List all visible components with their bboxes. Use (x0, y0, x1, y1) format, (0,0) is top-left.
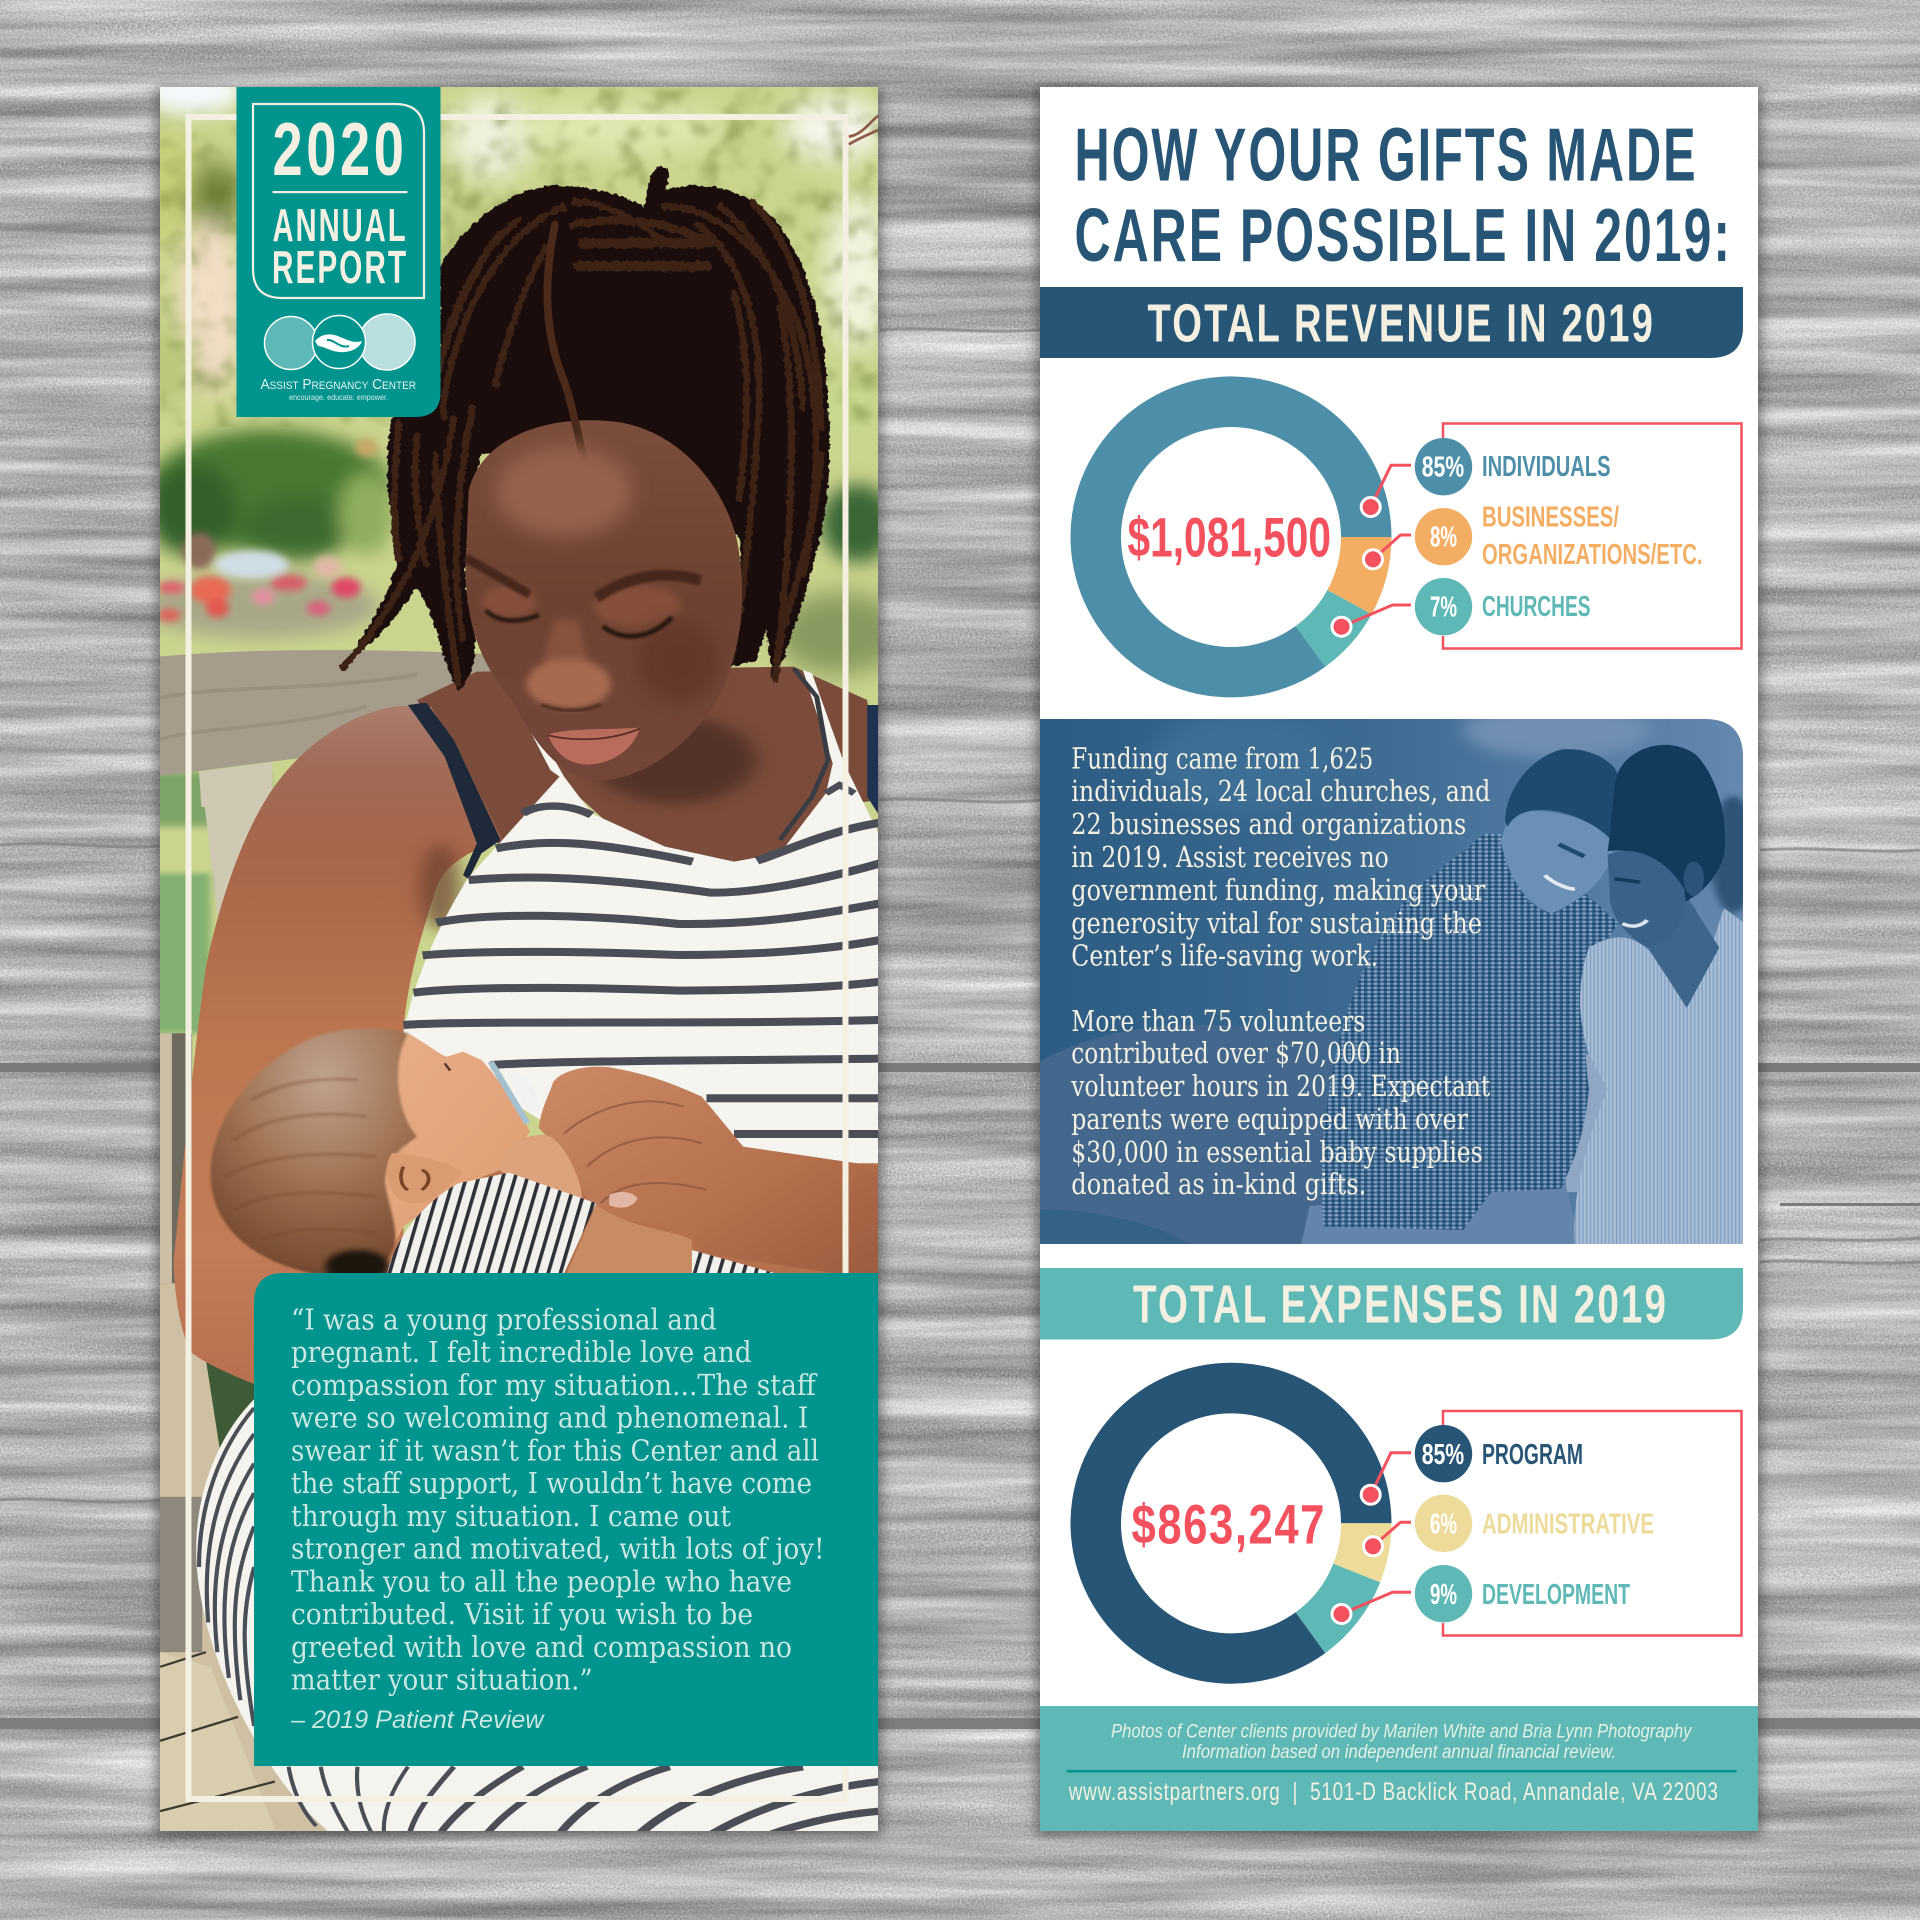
legend: individuals: 85% (1422, 452, 1464, 484)
legend: administrative (1415, 1495, 1654, 1552)
funding paragraph one: government funding, making your (1071, 873, 1485, 907)
legend: program (1415, 1425, 1583, 1482)
expenses legend bracket (1443, 1411, 1742, 1636)
quote text: swear if it wasn’t for this Center and all (291, 1434, 819, 1468)
legend: administrative: ADMINISTRATIVE (1482, 1508, 1654, 1540)
legend: individuals: INDIVIDUALS (1482, 451, 1610, 483)
quote text: compassion for my situation...The staff (291, 1368, 818, 1402)
funding paragraph two: More than 75 volunteers (1071, 1004, 1365, 1038)
contact line: www.assistpartners.org | 5101-D Backlick Road, Annandale, VA 22003 (1068, 1778, 1719, 1806)
revenue callout lines (1342, 465, 1411, 627)
funding paragraph two: parents were equipped with over (1071, 1102, 1468, 1136)
legend: development: 9% (1430, 1579, 1457, 1611)
quote text: contributed. Visit if you wish to be (291, 1597, 753, 1631)
panel: right card (1035, 87, 1758, 1831)
photo hair and face (341, 167, 830, 780)
funding paragraph one: generosity vital for sustaining the (1071, 906, 1482, 940)
photo frame line (188, 117, 846, 1799)
funding paragraph two: contributed over $70,000 in (1071, 1036, 1401, 1070)
funding paragraph one: individuals, 24 local churches, and (1071, 774, 1490, 808)
banner: total expenses: TOTAL EXPENSES IN 2019 (1133, 1275, 1668, 1335)
legend: development (1415, 1565, 1630, 1622)
funding paragraph one: in 2019. Assist receives no (1071, 840, 1389, 874)
annual report title: REPORT (272, 241, 408, 293)
funding paragraph one: 22 businesses and organizations (1071, 807, 1466, 841)
man's trousers (1300, 1185, 1582, 1247)
lips (548, 728, 640, 765)
mother's forearm and hand (481, 1163, 880, 1280)
legend: churches (1415, 578, 1590, 635)
baby arm (564, 1205, 692, 1280)
donut chart: revenue (1070, 376, 1392, 697)
quote text: Thank you to all the people who have (291, 1564, 792, 1598)
funding paragraph one (1071, 742, 1490, 972)
legend: businesses: 8% (1430, 522, 1457, 554)
revenue callout dots (1332, 498, 1382, 636)
panel: testimonial quote (254, 1273, 878, 1766)
baby sleeve below arm (692, 1250, 775, 1280)
photo background foliage (137, 69, 904, 826)
quote text: pregnant. I felt incredible love and (291, 1335, 752, 1369)
green below bench (151, 771, 270, 826)
panel: funding narrative with duotone photo (1035, 703, 1757, 1247)
annual report title: ANNUAL (272, 199, 408, 251)
legend: businesses (1415, 502, 1702, 571)
footer band (1040, 1706, 1758, 1831)
hair mass (341, 167, 830, 691)
baby striped sleeve (387, 1173, 596, 1273)
photo credits: Photos of Center clients provided by Marilen White and Bria Lynn Photography (1111, 1721, 1693, 1742)
logo: assist pregnancy center (260, 314, 416, 402)
baby hand (499, 1135, 582, 1198)
quote text: matter your situation.” (291, 1662, 593, 1696)
quote text: were so welcoming and phenomenal. I (291, 1400, 808, 1434)
legend: churches: CHURCHES (1482, 591, 1590, 623)
donut chart: expenses (1070, 1363, 1392, 1684)
man's checked shirt (1322, 834, 1619, 1230)
legend: program: 85% (1422, 1439, 1464, 1471)
face (465, 420, 742, 780)
baby ear (387, 1153, 463, 1203)
banner: total revenue (1040, 287, 1743, 358)
neck and chest skin (417, 667, 880, 867)
revenue total: $1,081,500 (1128, 506, 1331, 569)
funding paragraph two (1070, 1004, 1491, 1201)
quote text: “I was a young professional and (291, 1302, 717, 1336)
legend: program: PROGRAM (1482, 1439, 1583, 1471)
expenses callout lines (1342, 1453, 1411, 1614)
quote text: through my situation. I came out (291, 1499, 731, 1533)
logo: assist pregnancy center: encourage. educate. empower. (289, 393, 388, 402)
quote text (291, 1302, 824, 1696)
baby head (321, 1033, 530, 1280)
legend: administrative: 6% (1430, 1508, 1457, 1540)
nose (541, 620, 596, 679)
bench post and garden at left (204, 807, 262, 916)
woman's dress (1574, 908, 1745, 1247)
quote text: the staff support, I wouldn’t have come (291, 1466, 812, 1500)
eyebrows and eyes (465, 558, 701, 636)
photo: mother and newborn (137, 69, 904, 1844)
expenses total: $863,247 (1132, 1492, 1326, 1555)
annual report title (272, 199, 408, 293)
photo credits: Information based on independent annual financial review. (1182, 1742, 1616, 1763)
tab outline box (253, 104, 424, 298)
main heading (1074, 113, 1732, 277)
woman's hair and face (1608, 745, 1725, 903)
pacifier (491, 1062, 527, 1123)
photo torso, arm and baby (151, 667, 880, 1390)
funding paragraph one: Funding came from 1,625 (1071, 742, 1373, 776)
funding paragraph one: Center’s life-saving work. (1071, 938, 1378, 972)
duotone couple photo (1035, 703, 1757, 1247)
mother's striped top (403, 670, 880, 1170)
photo lower-left bench and belly (160, 1238, 880, 1844)
year: 2020 (272, 107, 408, 191)
hair locks (344, 202, 821, 684)
quote text: stronger and motivated, with lots of joy! (291, 1532, 824, 1566)
mother's shoulder and arm (174, 706, 502, 1390)
man's face and hair (1500, 811, 1613, 913)
legend: businesses: BUSINESSES/ (1482, 502, 1619, 534)
funding paragraph two: $30,000 in essential baby supplies (1071, 1135, 1483, 1169)
banner: total expenses (1040, 1268, 1743, 1340)
legend: businesses: ORGANIZATIONS/ETC. (1482, 539, 1702, 571)
panel: annual report tab (236, 87, 440, 417)
expenses callout dots (1332, 1485, 1382, 1624)
quote attribution: – 2019 Patient Review (290, 1706, 545, 1734)
funding paragraph two: volunteer hours in 2019. Expectant (1070, 1069, 1491, 1103)
quote text: greeted with love and compassion no (291, 1630, 792, 1664)
strap (408, 703, 501, 879)
panel: left card (137, 69, 904, 1844)
funding paragraph two: donated as in-kind gifts. (1071, 1167, 1366, 1201)
legend: development: DEVELOPMENT (1482, 1579, 1630, 1611)
logo: assist pregnancy center: Assist Pregnancy Center (260, 376, 416, 393)
photo credits (1111, 1721, 1693, 1763)
wooden bench back (160, 650, 491, 776)
banner: total revenue: TOTAL REVENUE IN 2019 (1148, 294, 1655, 354)
card shadows (156, 87, 1762, 1837)
striped belly (196, 1397, 880, 1844)
legend: churches: 7% (1430, 592, 1457, 624)
revenue legend bracket (1443, 424, 1742, 648)
legend: individuals (1415, 438, 1610, 495)
